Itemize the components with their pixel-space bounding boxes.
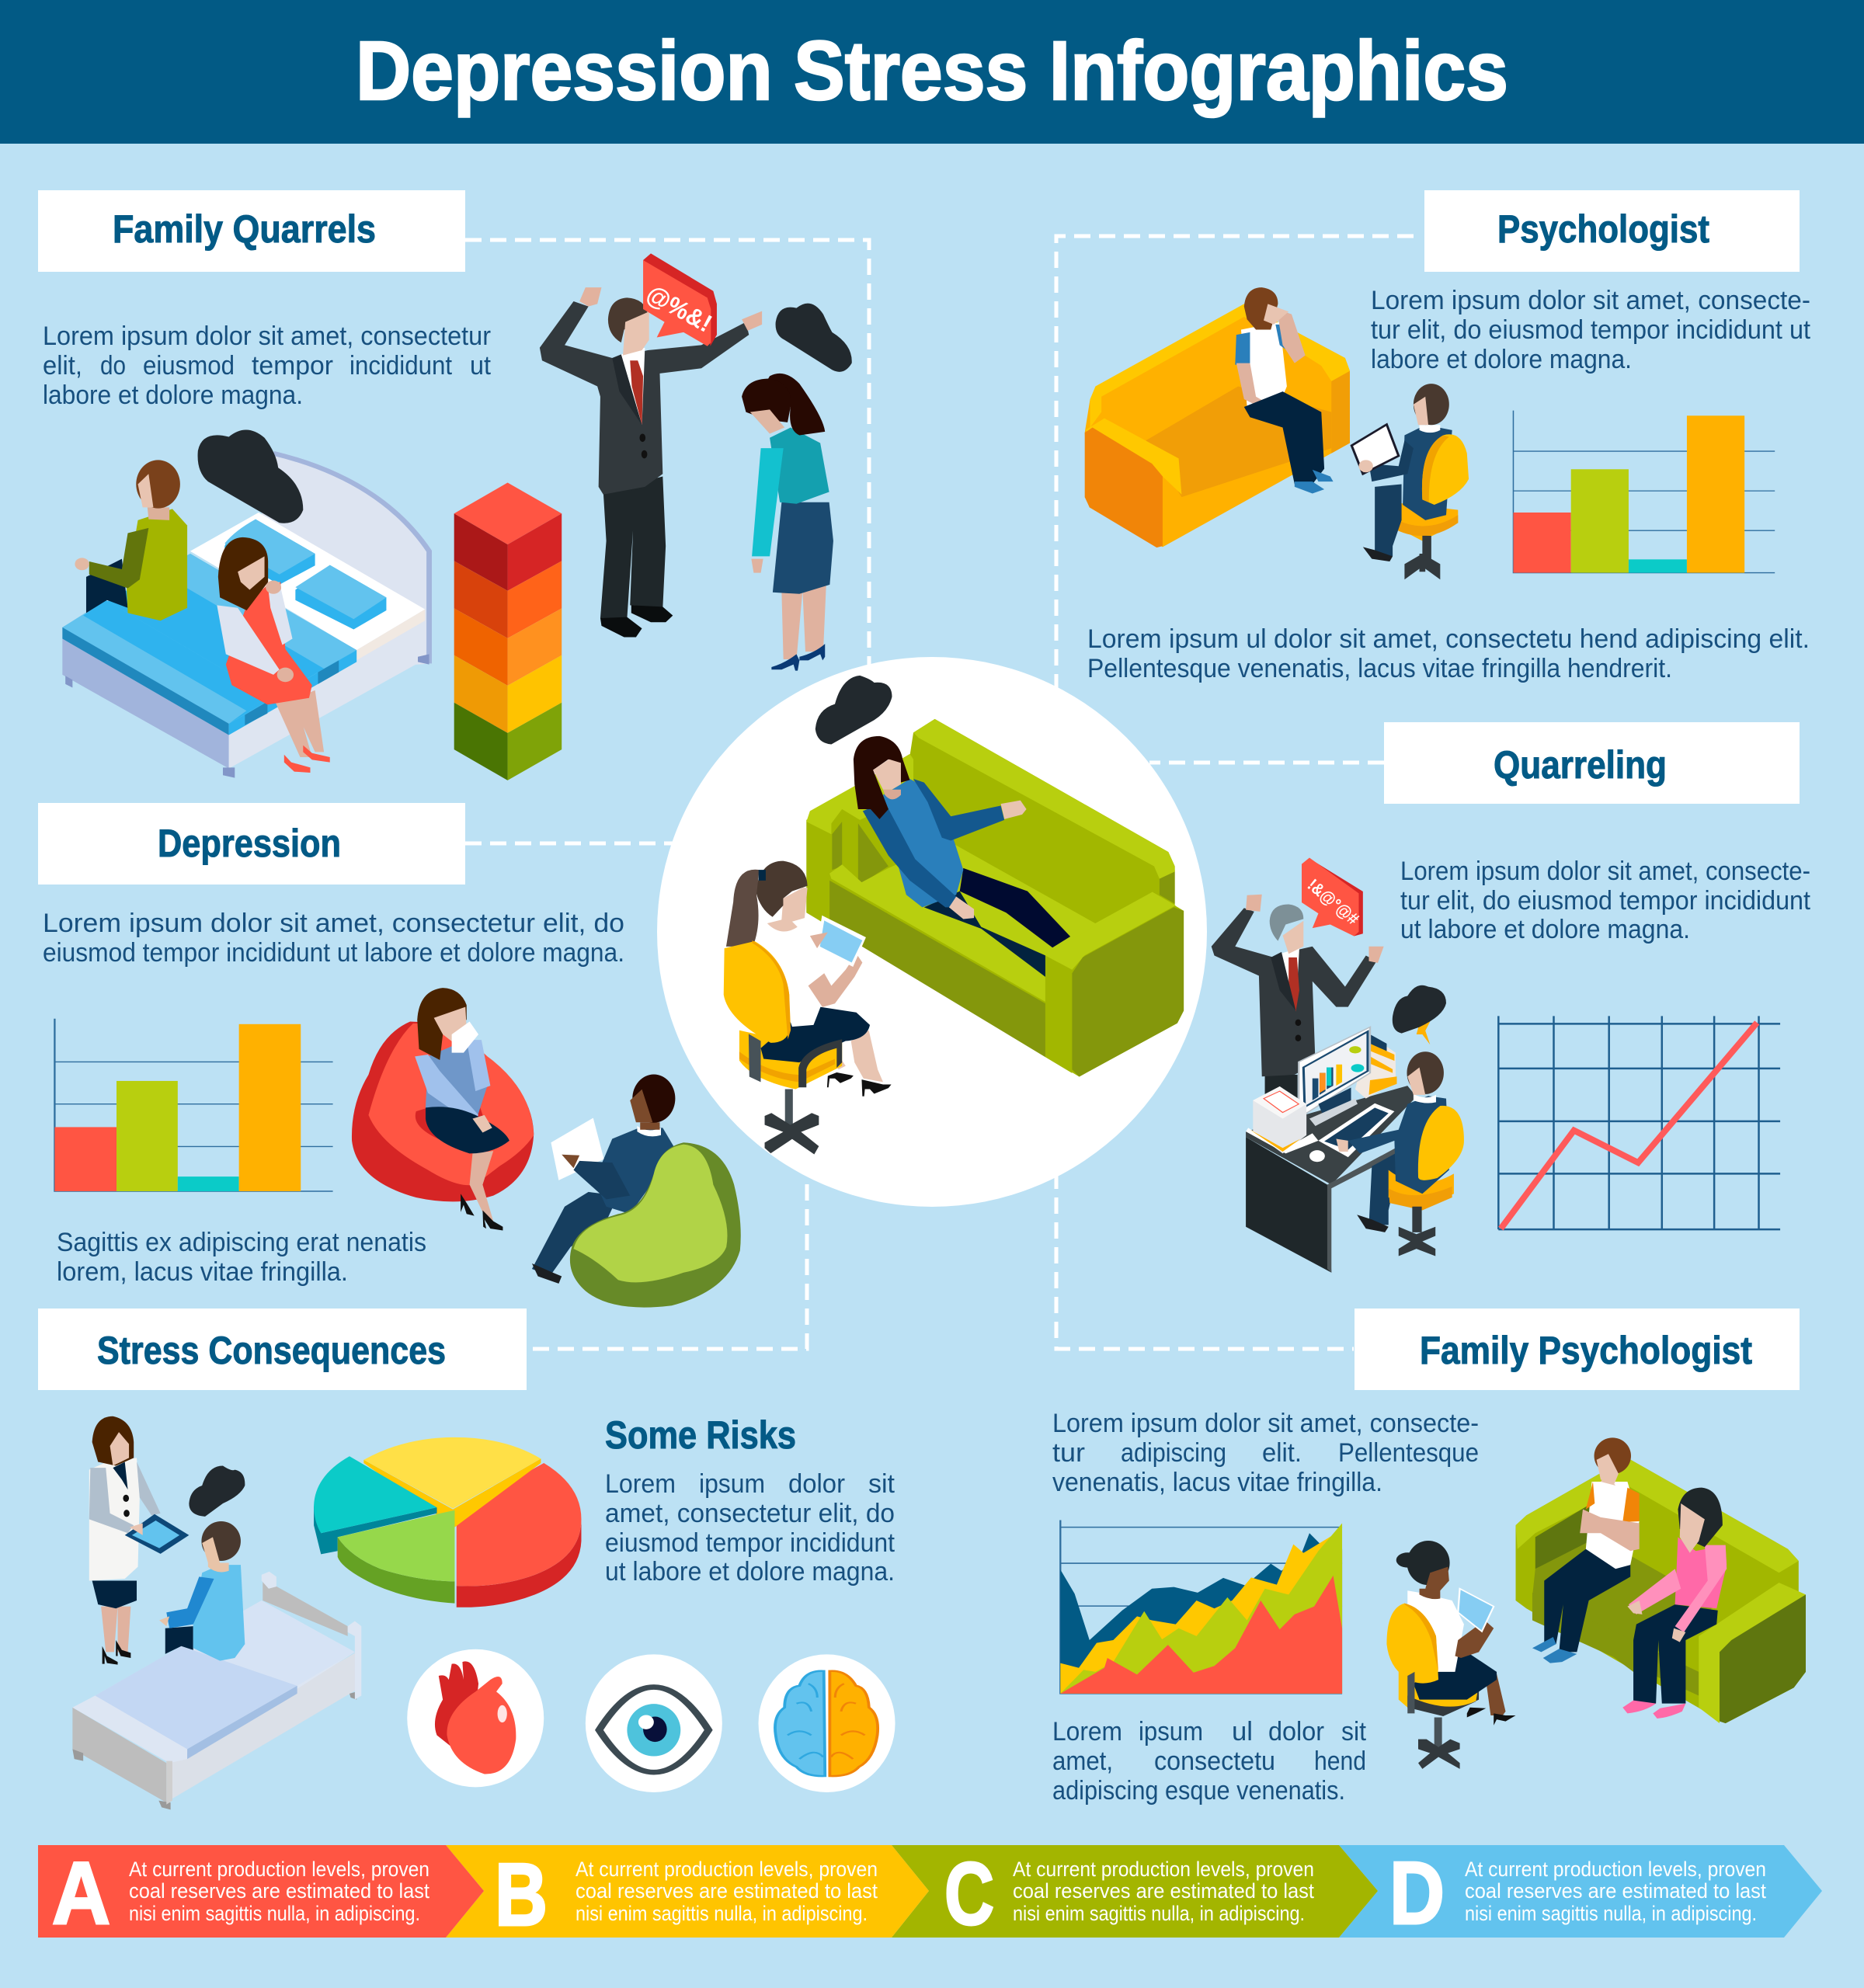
text: depression lower — [57, 1228, 426, 1287]
text: psychologist: tur elit, do eiusmod tempor incididunt ut — [1371, 315, 1811, 345]
person: shouting man — [540, 287, 762, 638]
text: quarreling: tur elit, do eiusmod tempor incididunt — [1400, 886, 1811, 916]
text: some risks: ipsum — [699, 1469, 765, 1499]
person: psychologist on chair — [1351, 384, 1469, 579]
banner text C: coal reserves are estimated to last — [1013, 1879, 1314, 1903]
icon: office desk with computer — [1246, 1027, 1417, 1273]
text: psychologist lower: Pellentesque venenatis, lacus vitae fringilla hendrerit. — [1087, 654, 1672, 683]
icon: stack of books — [1355, 1034, 1396, 1099]
text: family psychologist lower — [1052, 1717, 1367, 1806]
icon: heart — [407, 1649, 544, 1787]
chart: stacked isometric tower — [454, 483, 562, 780]
title: Depression Stress Infographics — [356, 23, 1508, 117]
icon: eye — [586, 1654, 722, 1792]
icon: cloud — [198, 430, 303, 523]
arrow: D — [1339, 1845, 1822, 1938]
text: family psychologist lower: ipsum — [1139, 1717, 1203, 1746]
text: family psychologist: adipiscing — [1121, 1438, 1226, 1468]
text: speech bubble symbols: !&@°@# — [1304, 875, 1363, 929]
text: family quarrels: elit, — [43, 351, 82, 381]
text: some risks: dolor — [788, 1469, 845, 1499]
heading: Stress Consequences: Stress Consequences — [97, 1329, 446, 1372]
person: doctor with tablet — [89, 1416, 189, 1665]
text: some risks: amet, consectetur elit, do — [605, 1499, 895, 1528]
person: woman in pink — [1622, 1488, 1727, 1719]
icon: red bean bag — [352, 1021, 534, 1201]
banner text B: At current production levels, proven — [576, 1858, 878, 1881]
icon: keyboard and mouse — [1318, 1103, 1394, 1157]
letter B: B — [495, 1846, 548, 1945]
text: quarreling — [1400, 857, 1811, 944]
heading: Family Psychologist: Family Psychologist — [1420, 1329, 1752, 1372]
text: family quarrels: Lorem ipsum dolor sit amet, consectetur — [43, 321, 491, 351]
arrow: B — [446, 1845, 929, 1938]
text: depression — [43, 909, 624, 968]
icon: brain — [759, 1654, 895, 1792]
person: man on bed — [75, 460, 187, 620]
heading: Family Quarrels: Family Quarrels — [113, 207, 376, 251]
chart: 3D pie — [314, 1437, 581, 1607]
icon: computer monitor — [1299, 1027, 1370, 1113]
text: quarreling: ut labore et dolore magna. — [1400, 915, 1690, 944]
text: family quarrels: incididunt — [350, 351, 453, 381]
text: family psychologist: Pellentesque — [1338, 1438, 1479, 1468]
text: family psychologist lower: hend — [1314, 1746, 1366, 1776]
icon: yellow sofa — [1085, 304, 1350, 547]
icon: green sofa — [1516, 1458, 1806, 1723]
text: family psychologist lower: Lorem — [1052, 1717, 1122, 1746]
text: some risks — [605, 1469, 895, 1587]
text: family quarrels: labore et dolore magna. — [43, 381, 303, 410]
person: grey-haired boss — [1212, 895, 1384, 1100]
text: family psychologist lower: amet, — [1052, 1746, 1113, 1776]
illustration: psychologist scene — [1085, 287, 1775, 579]
banner: A B C D arrows — [38, 1844, 1822, 1945]
banner text B: coal reserves are estimated to last — [576, 1879, 878, 1903]
text: family quarrels: do — [100, 351, 126, 381]
text: some risks: ut labore et dolore magna. — [605, 1557, 895, 1587]
banner text D: At current production levels, proven — [1465, 1858, 1766, 1881]
icon: cloud with lightning — [1393, 985, 1446, 1044]
text: depression: eiusmod tempor incididunt ut labore et dolore magna. — [43, 938, 624, 968]
banner text C: nisi enim sagittis nulla, in adipiscing. — [1013, 1902, 1305, 1925]
banner text D: nisi enim sagittis nulla, in adipiscing. — [1465, 1902, 1757, 1925]
central circle — [657, 657, 1207, 1207]
letter C: C — [944, 1845, 994, 1944]
banner text A: At current production levels, proven — [129, 1858, 429, 1881]
letter A: A — [52, 1844, 110, 1943]
callout: angry speech bubble — [643, 253, 717, 346]
person: seated therapist woman — [724, 861, 892, 1155]
text: some risks: Lorem — [605, 1469, 676, 1499]
illustration: family psychologist — [1060, 1437, 1806, 1769]
text: some risks: eiusmod tempor incididunt — [605, 1528, 895, 1558]
person: therapist woman on chair — [1386, 1541, 1516, 1769]
illustration: depression scene, bar chart and bean bags — [54, 988, 741, 1308]
person: man with crossed arms — [1532, 1437, 1640, 1663]
illustration: stress consequences — [72, 1416, 895, 1809]
text: depression lower: Sagittis ex adipiscing erat nenatis — [57, 1228, 426, 1257]
chart: stacked area — [1060, 1520, 1342, 1694]
person: bearded man on sofa — [1235, 287, 1334, 493]
banner text D — [1465, 1858, 1766, 1925]
text: quarreling: Lorem ipsum dolor sit amet, consecte- — [1400, 857, 1810, 886]
text: family psychologist: elit. — [1262, 1438, 1302, 1468]
person: patient on bed — [159, 1521, 245, 1661]
text: family psychologist lower: ul — [1232, 1717, 1253, 1746]
illustration: central therapy scene — [724, 676, 1184, 1155]
icon: green bean bag — [570, 1142, 741, 1308]
person: reclining woman — [854, 736, 1070, 977]
text: some risks: sit — [868, 1469, 895, 1499]
person: woman on bed — [217, 537, 330, 773]
person: seated employee — [1336, 1051, 1464, 1256]
text: family quarrels — [43, 321, 492, 410]
banner text A: coal reserves are estimated to last — [129, 1879, 429, 1903]
text: family quarrels: tempor — [252, 351, 333, 381]
text: family psychologist: venenatis, lacus vitae fringilla. — [1052, 1468, 1382, 1497]
text: family psychologist — [1052, 1409, 1479, 1497]
person: woman on bean bag — [415, 988, 509, 1230]
banner text B: nisi enim sagittis nulla, in adipiscing. — [576, 1902, 868, 1925]
text: family psychologist lower: sit — [1341, 1717, 1367, 1746]
icon: paper stack — [1253, 1086, 1306, 1153]
banner text C — [1013, 1858, 1314, 1925]
text: psychologist: Lorem ipsum dolor sit amet, consecte- — [1371, 286, 1810, 315]
icon: cloud — [776, 304, 852, 372]
heading: Some Risks: Some Risks — [605, 1413, 796, 1457]
text: depression lower: lorem, lacus vitae fringilla. — [57, 1257, 348, 1287]
text: psychologist: labore et dolore magna. — [1371, 345, 1632, 374]
chart: depression bars — [54, 1019, 333, 1191]
icon: cloud — [816, 676, 892, 744]
text: psychologist lower — [1087, 624, 1810, 683]
text: family psychologist lower: consectetu — [1154, 1746, 1275, 1776]
banner text A: nisi enim sagittis nulla, in adipiscing. — [129, 1902, 420, 1925]
text: psychologist — [1371, 286, 1811, 374]
text: psychologist lower: Lorem ipsum ul dolor sit amet, consectetu hend adipiscing elit. — [1087, 624, 1810, 654]
letter D: D — [1389, 1844, 1445, 1943]
illustration: family quarrels bed scene — [62, 253, 852, 780]
section heading boxes — [38, 190, 1800, 1390]
person: bowing woman — [742, 374, 833, 671]
heading: Psychologist: Psychologist — [1497, 207, 1709, 251]
callout: angry speech bubble — [1302, 858, 1363, 937]
icon: cloud — [189, 1466, 245, 1517]
heading: Quarreling: Quarreling — [1494, 743, 1667, 787]
icon: hospital bed — [72, 1572, 361, 1809]
banner text C: At current production levels, proven — [1013, 1858, 1314, 1881]
arrow: C — [892, 1845, 1378, 1938]
header band — [0, 0, 1864, 144]
illustration: quarreling office scene — [1212, 858, 1780, 1273]
text: family psychologist: Lorem ipsum dolor sit amet, consecte- — [1052, 1409, 1479, 1438]
banner text B — [576, 1858, 878, 1925]
banner text D: coal reserves are estimated to last — [1465, 1879, 1766, 1903]
chart: rising line — [1498, 1016, 1780, 1229]
arrow: A — [38, 1845, 484, 1938]
text: family psychologist lower: adipiscing esque venenatis. — [1052, 1776, 1345, 1806]
person: man on bean bag with paper — [532, 1074, 675, 1284]
heading: Depression: Depression — [158, 822, 341, 865]
text: depression: Lorem ipsum dolor sit amet, consectetur elit, do — [43, 909, 624, 938]
text: family psychologist: tur — [1052, 1438, 1085, 1468]
icon: green sofa — [806, 719, 1184, 1076]
text: family quarrels: eiusmod — [143, 351, 235, 381]
chart: psychologist bars — [1513, 411, 1775, 573]
text: speech bubble symbols: @%&! — [642, 280, 717, 338]
banner text A — [129, 1858, 429, 1925]
text: family quarrels: ut — [470, 351, 492, 381]
text: family psychologist lower: dolor — [1268, 1717, 1324, 1746]
